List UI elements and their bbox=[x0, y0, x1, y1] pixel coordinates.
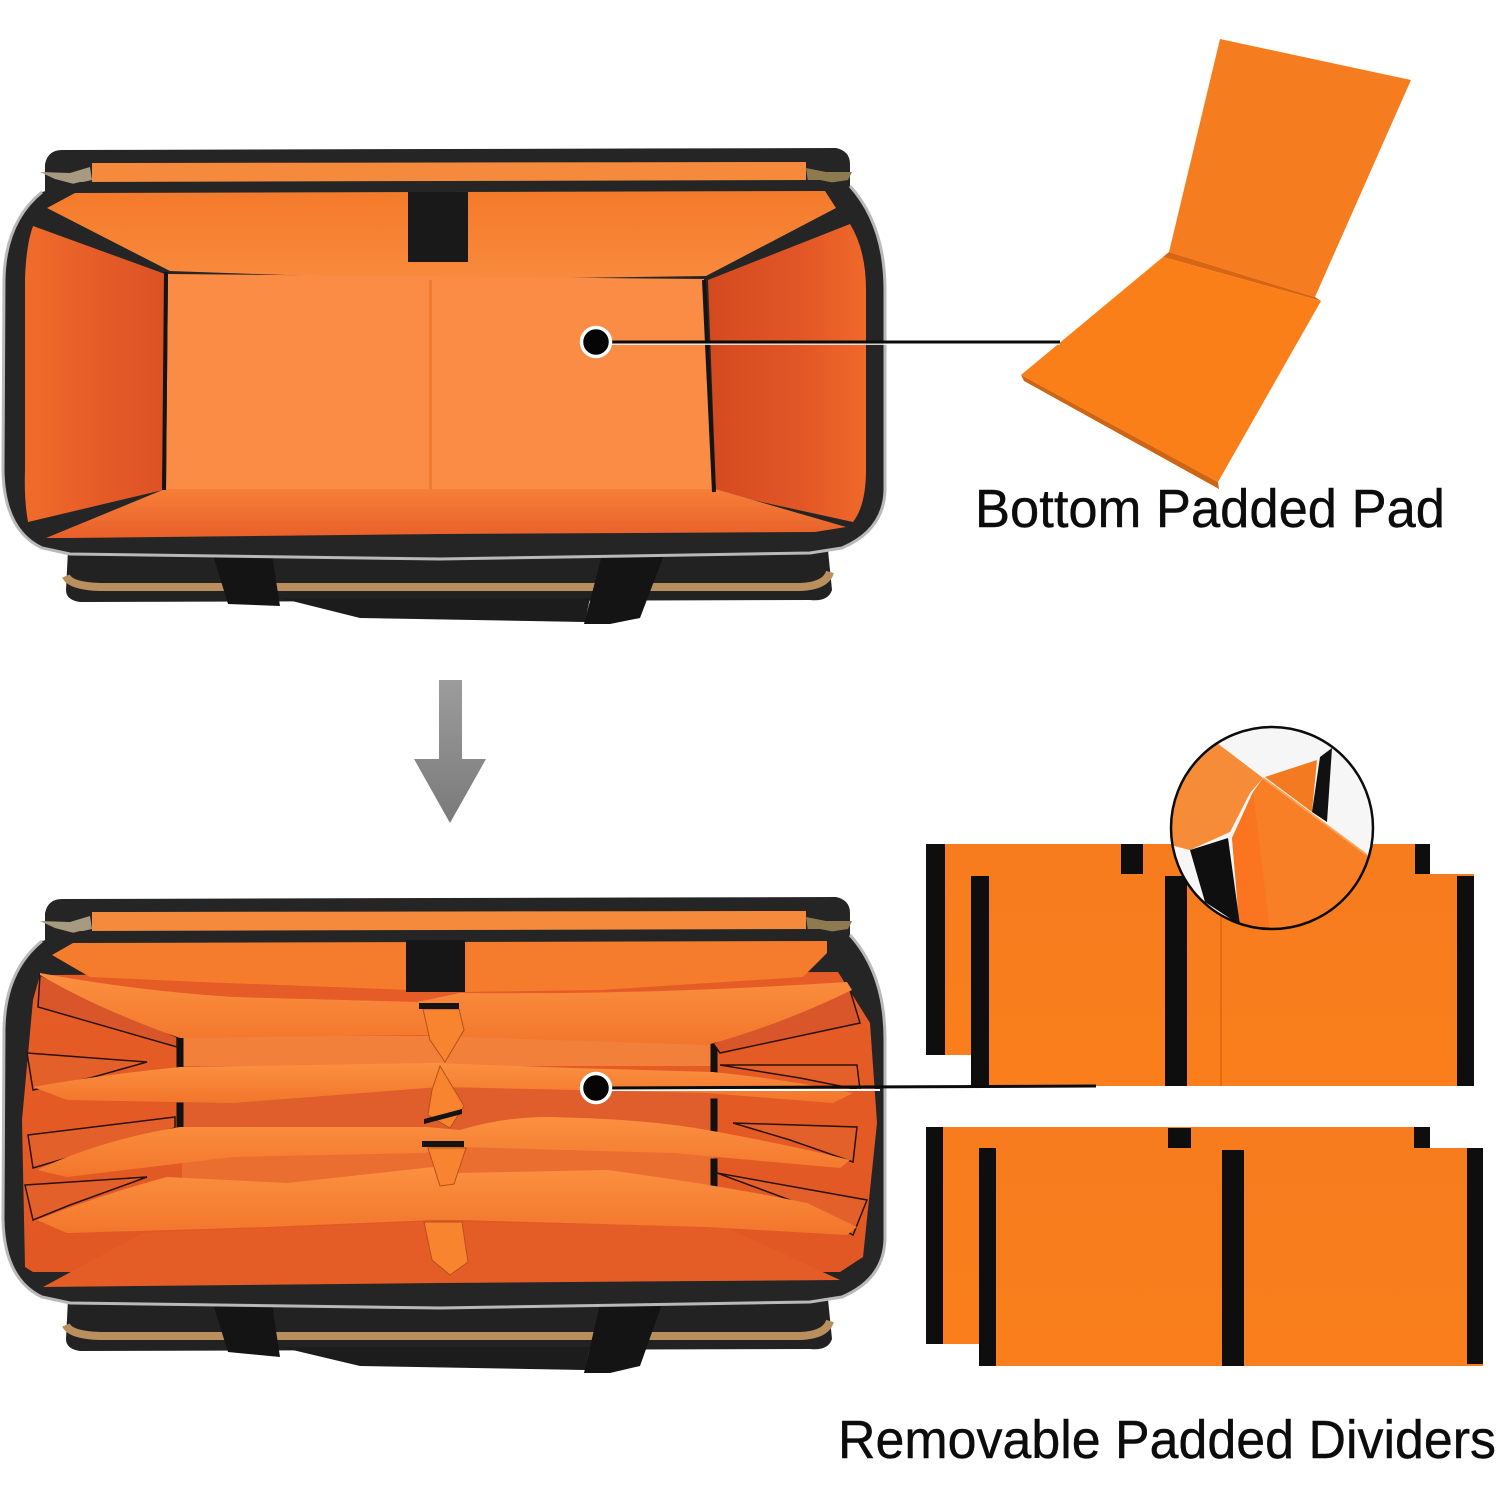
label: Bottom Padded Pad: Bottom Padded Pad bbox=[975, 479, 1445, 539]
bag outer shell bbox=[3, 929, 885, 1308]
top bag: open with bottom padded pad bbox=[3, 148, 885, 624]
back divider bbox=[926, 844, 1430, 1055]
back interior wall bbox=[52, 941, 827, 992]
bottom padded floor bbox=[166, 274, 714, 490]
interior side and floor base bbox=[22, 972, 877, 1272]
bag front base with zipper and handles bbox=[66, 1299, 832, 1373]
back interior wall bbox=[47, 191, 836, 280]
arrow: pointing down bbox=[414, 680, 486, 823]
left interior wall bbox=[25, 226, 165, 522]
bag lid strip bbox=[40, 897, 852, 941]
front interior wall bbox=[43, 1222, 840, 1287]
right wall velcro straps bbox=[713, 990, 867, 1235]
velcro strap bbox=[408, 192, 468, 262]
centre divider folds bbox=[423, 1009, 468, 1275]
front divider bbox=[979, 1148, 1483, 1366]
right interior wall bbox=[708, 224, 866, 522]
front divider bbox=[971, 874, 1474, 1086]
silver zipper edge bbox=[3, 186, 885, 559]
divider 3 bbox=[37, 1117, 850, 1177]
bottom bag: with dividers installed bbox=[3, 897, 885, 1373]
callout: dividers pointer bbox=[582, 1074, 1096, 1102]
silver zipper edge bbox=[3, 935, 885, 1308]
floor visible between dividers bbox=[178, 1036, 716, 1190]
bag lid strip bbox=[40, 148, 852, 192]
bag front base with zipper and handles bbox=[66, 550, 832, 624]
inset circle: divider velcro detail bbox=[1165, 727, 1380, 935]
back divider bbox=[926, 1127, 1430, 1344]
divider 1 bbox=[40, 973, 852, 1045]
icon: folded orange padded pad bbox=[1021, 39, 1411, 489]
left wall velcro straps bbox=[25, 975, 177, 1220]
front interior wall bbox=[46, 489, 846, 538]
callout: bottom pad pointer bbox=[582, 328, 1060, 356]
upper divider set bbox=[926, 844, 1474, 1086]
velcro strap bbox=[406, 940, 465, 992]
divider 4 bbox=[37, 1167, 857, 1235]
divider 2 bbox=[33, 1063, 853, 1103]
bag outer shell bbox=[3, 180, 885, 559]
lower divider set bbox=[926, 1127, 1483, 1366]
divider tabs bbox=[419, 1003, 464, 1147]
